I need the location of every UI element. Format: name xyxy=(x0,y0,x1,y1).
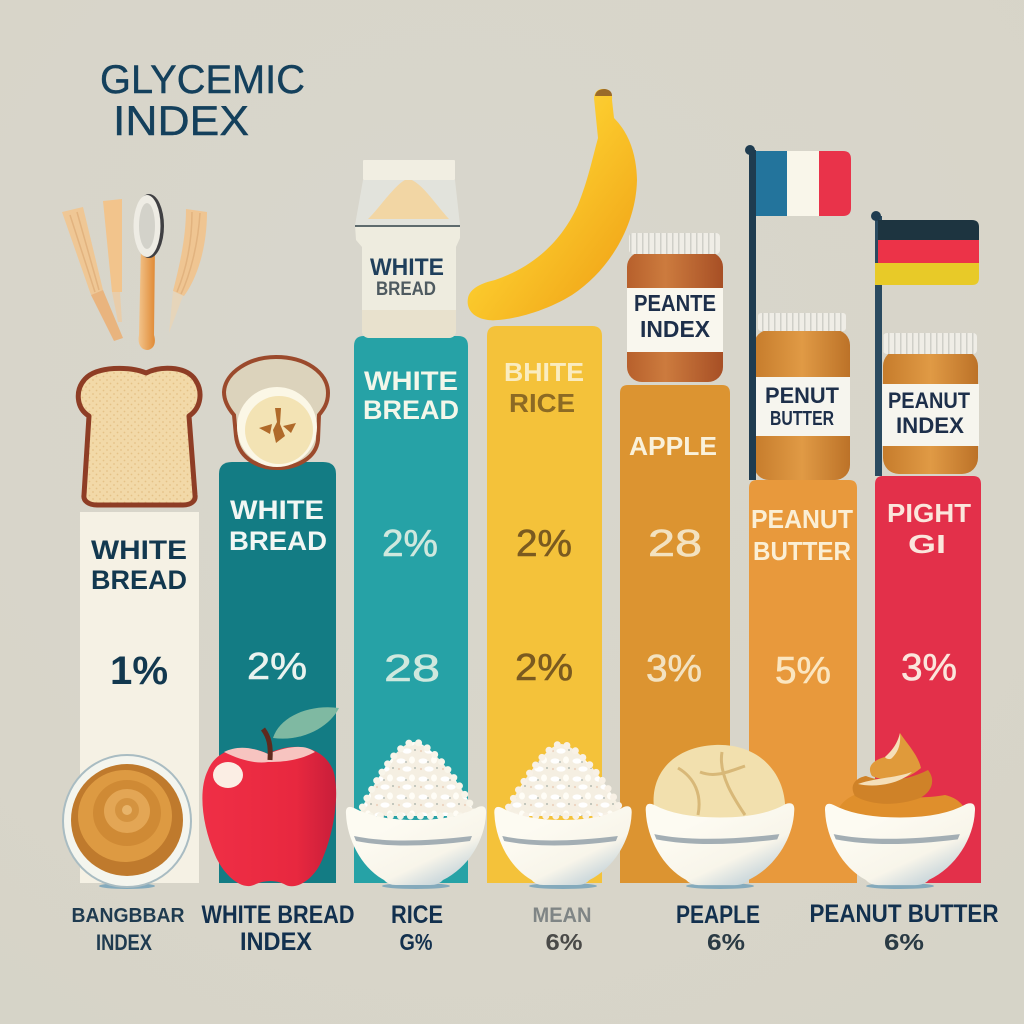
title: GLYCEMIC xyxy=(100,58,305,102)
label: column 3: RICE xyxy=(391,901,443,929)
icon: carton of white bread xyxy=(355,160,460,338)
bar: orange: APPLE xyxy=(629,431,717,461)
icon: peanut butter bowl xyxy=(63,755,191,887)
icon: peanut jar 1: INDEX xyxy=(640,316,711,342)
bar: light orange: PEANUT xyxy=(751,504,853,534)
title: INDEX xyxy=(113,97,249,144)
label: column 1 xyxy=(72,905,185,955)
icon: banana chunks bowl xyxy=(646,745,794,885)
bar: light orange: 5% xyxy=(775,650,831,692)
label: column 4 xyxy=(532,904,592,955)
icon: peanut jar 1: PEANTE xyxy=(634,290,716,316)
bar: orange xyxy=(620,385,730,883)
label: column 3: G% xyxy=(400,929,432,955)
icon: carton of white bread: BREAD xyxy=(376,279,436,300)
label: column 5 xyxy=(676,901,760,955)
label: column 3 xyxy=(391,901,443,955)
icon: German flag xyxy=(871,211,979,476)
icon: carton of white bread: WHITE xyxy=(370,254,444,281)
bar: red xyxy=(875,476,981,883)
bar: yellow: 2% xyxy=(516,523,572,565)
icon: peanut jar 3: PEANUT xyxy=(888,388,971,413)
icon: utensils xyxy=(62,194,207,350)
bar: dark teal: 2% xyxy=(247,646,307,688)
label: column 6: 6% xyxy=(884,929,924,955)
icon: peanut jar 2: PENUT xyxy=(765,383,840,408)
label: column 4: 6% xyxy=(546,929,582,955)
bar: teal: 28 xyxy=(384,648,440,690)
bar: red: GI xyxy=(908,529,946,559)
bar: white bread: 1% xyxy=(110,649,168,693)
icon: bread slice xyxy=(78,368,200,505)
icon: bread with banana slice xyxy=(224,357,328,468)
bar: light orange: BUTTER xyxy=(753,536,851,566)
bar: teal: WHITE xyxy=(364,366,458,396)
label: column 5: 6% xyxy=(707,929,745,955)
label: column 1: INDEX xyxy=(96,930,152,955)
icon: peanut jar 3: INDEX xyxy=(896,413,964,438)
icon: peanut jar 2 xyxy=(754,313,850,480)
bar: red: 3% xyxy=(901,647,957,689)
bar: yellow xyxy=(487,326,602,883)
bar: white bread xyxy=(80,512,199,883)
label: column 5: PEAPLE xyxy=(676,901,760,929)
icon: French flag xyxy=(745,145,851,480)
icon: rice bowl 1 xyxy=(346,742,486,885)
bar: yellow: BHITE xyxy=(504,357,584,387)
bar: yellow: RICE xyxy=(509,388,575,418)
label: column 2: INDEX xyxy=(240,928,312,956)
bar: teal: BREAD xyxy=(363,395,459,425)
label: column 2 xyxy=(202,901,354,956)
bar: teal: 2% xyxy=(382,523,438,565)
icon: peanut butter swirl bowl xyxy=(825,733,975,885)
label: column 6: PEANUT BUTTER xyxy=(810,900,998,928)
ground shadow xyxy=(99,883,934,889)
icon: peanut jar 1 xyxy=(627,233,723,382)
bar: orange: 3% xyxy=(646,648,702,690)
icon: apple xyxy=(202,707,339,886)
bar: white bread: BREAD xyxy=(91,565,187,595)
icon: banana xyxy=(468,89,637,320)
bar: red: PIGHT xyxy=(887,498,971,528)
bar: dark teal: BREAD xyxy=(229,526,327,556)
bar: teal xyxy=(354,336,468,883)
label: column 2: WHITE BREAD xyxy=(202,901,354,929)
title xyxy=(100,58,305,144)
bar: yellow: 2% xyxy=(515,647,573,689)
bar: dark teal: WHITE xyxy=(230,495,324,525)
bar: dark teal xyxy=(219,462,336,883)
label: column 1: BANGBBAR xyxy=(72,905,185,927)
label: column 4: MEAN xyxy=(532,904,592,927)
bar: white bread: WHITE xyxy=(91,535,187,565)
icon: peanut jar 2: BUTTER xyxy=(770,408,834,430)
icon: rice bowl 2 xyxy=(494,744,632,885)
icon: peanut jar 3 xyxy=(882,333,979,474)
bar: orange: 28 xyxy=(648,523,702,565)
label: column 6 xyxy=(810,900,998,955)
bar: light orange xyxy=(749,480,857,883)
